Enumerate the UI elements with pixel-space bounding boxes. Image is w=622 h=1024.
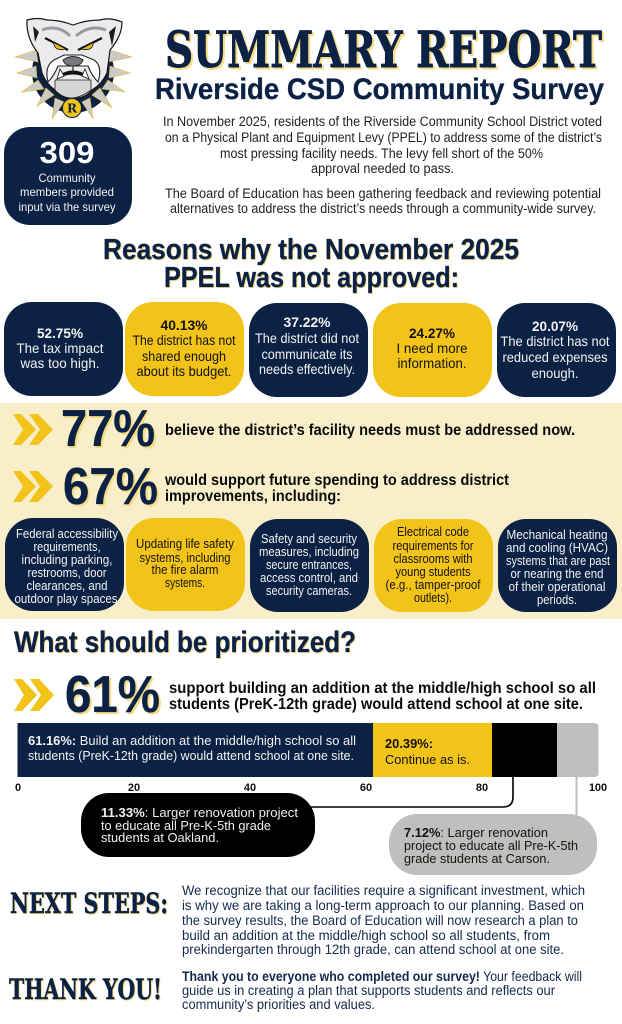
improvement card: HVAC: Mechanical heating	[506, 528, 608, 542]
reason card: budget: 40.13%	[160, 317, 208, 333]
head	[27, 18, 122, 99]
stat text: 61%	[169, 680, 596, 713]
improvement card: security: security cameras.	[266, 584, 352, 598]
improvement card: HVAC: periods.	[537, 593, 577, 607]
improvement card: accessibility	[5, 518, 124, 611]
icon: bulldog mascot logo: R	[67, 102, 78, 116]
improvement card: accessibility: requirements,	[34, 540, 100, 554]
improvement card: life safety: systems, including	[140, 551, 230, 565]
reason card: tax impact	[4, 302, 123, 396]
reason card: more information	[373, 303, 492, 397]
callout: Carson 7.12%	[389, 814, 597, 875]
heading: what should be prioritized: What should be prioritized?	[14, 626, 356, 659]
improvement card: security: measures, including	[259, 545, 359, 559]
stat card: 309 respondents: input via the survey	[18, 200, 116, 214]
improvement card: security	[250, 519, 369, 612]
improvement card: security: access control, and	[260, 571, 358, 585]
improvement card: security: secure entrances,	[266, 558, 352, 572]
stat text: 67%	[164, 472, 509, 505]
reason card: budget: shared enough	[142, 348, 226, 364]
improvement card: HVAC: of their operational	[508, 580, 606, 594]
improvement card: accessibility: restrooms, door	[28, 566, 106, 580]
chart axis labels: 60	[360, 782, 372, 794]
stat text: 67%: improvements, including:	[165, 488, 341, 505]
reason card: tax impact: was too high.	[20, 355, 99, 371]
intro text: most pressing facility needs. The levy fell short of the 50%	[220, 146, 543, 161]
thank you text	[182, 969, 582, 1012]
heading: reasons	[103, 234, 519, 294]
improvement card: accessibility: including parking,	[22, 553, 112, 567]
improvement card: electrical	[374, 519, 493, 612]
reason card: expenses: enough.	[532, 365, 578, 381]
stacked bar chart	[18, 723, 598, 777]
improvement card: HVAC	[498, 519, 617, 612]
reason card: communication: The district did not	[255, 330, 359, 346]
callout: Oakland 11.33%: students at Oakland.	[101, 831, 219, 845]
eyes	[53, 42, 94, 50]
stacked bar chart: Continue as is.	[385, 753, 470, 767]
thank you text: guide us in creating a plan that supports students and reflects our	[182, 983, 555, 998]
chart axis labels: 80	[476, 782, 488, 794]
reason card: tax impact: 52.75%	[37, 325, 84, 341]
callout: Carson 7.12%: 7.12%: Larger renovation	[404, 826, 548, 840]
improvement card: accessibility: clearances, and	[26, 579, 108, 593]
callout: Carson 7.12%: project to educate all Pre-K-5th	[404, 839, 578, 853]
heading: next steps: NEXT STEPS:	[10, 887, 168, 920]
icon: bulldog mascot logo	[15, 18, 132, 119]
stat: 61%: 61%	[65, 666, 160, 724]
improvement card: accessibility: outdoor play spaces	[14, 592, 118, 606]
intro text	[163, 114, 602, 216]
stat: 67%: 67%	[63, 458, 158, 516]
improvement card: HVAC: and cooling (HVAC)	[506, 541, 608, 555]
stat text: 67%: would support future spending to address district	[164, 472, 509, 489]
improvement card: electrical: (e.g., tamper-proof	[386, 578, 481, 592]
connector: black callout	[300, 777, 513, 807]
reason card: communication: 37.22%	[284, 314, 331, 330]
next steps text: We recognize that our facilities require a significant investment, which	[182, 883, 585, 898]
improvement card: electrical: young students	[396, 565, 470, 579]
stacked bar chart: students (PreK-12th grade) would attend school at one site.	[28, 749, 354, 763]
next steps text: the survey results, the Board of Education will now research a plan to	[182, 913, 578, 928]
improvement card: HVAC: or nearing the end	[510, 567, 604, 581]
intro text: approval needed to pass.	[311, 161, 454, 176]
reason card: expenses: reduced expenses	[502, 349, 608, 365]
reason card: tax impact: The tax impact	[16, 340, 104, 356]
thank you text: Thank you to everyone who completed our survey! Your feedback will	[182, 969, 582, 984]
improvement card: life safety: systems.	[165, 576, 205, 590]
improvement card: electrical: Electrical code	[397, 525, 469, 539]
improvement card: life safety: the fire alarm	[152, 563, 218, 577]
heading: thank you: THANK YOU!	[9, 973, 162, 1006]
reason card: more information: information.	[398, 355, 466, 371]
medallion	[62, 98, 82, 118]
stat card: 309 respondents: members provided	[20, 185, 114, 199]
stacked bar chart: 61.16%: Build an addition at the middle/high school so all	[28, 734, 356, 748]
stat text: 61%: support building an addition at the middle/high school so all	[169, 680, 596, 697]
next steps text	[182, 883, 585, 957]
chart axis labels: 40	[244, 782, 256, 794]
muzzle	[47, 55, 100, 82]
improvement card: accessibility: Federal accessibility	[16, 527, 119, 541]
reason card: expenses: 20.07%	[532, 318, 579, 334]
reason card: budget: about its budget.	[136, 363, 232, 379]
next steps text: is why we are taking a long-term approach to our planning. Based on	[182, 898, 584, 913]
stat card: 309 respondents: 309	[40, 135, 94, 170]
icon: chevrons 61%	[14, 679, 54, 711]
icon: chevrons 77%	[13, 414, 53, 445]
reason card: communication: needs effectively.	[259, 361, 355, 377]
chart axis labels: 20	[128, 782, 140, 794]
reason card: communication	[249, 303, 368, 397]
improvement card: electrical: classrooms with	[394, 552, 472, 566]
reason card: more information: 24.27%	[409, 325, 456, 341]
stat: 77%: 77%	[61, 400, 155, 458]
callout: Carson 7.12%: grade students at Carson.	[404, 852, 550, 866]
callout: Oakland 11.33%: to educate all Pre-K-5th grade	[101, 819, 271, 833]
improvement card: electrical: requirements for	[392, 539, 474, 553]
subtitle: Riverside CSD Community Survey	[155, 73, 605, 106]
next steps text: prekindergarten through 12th grade, can attend school at one site.	[182, 942, 564, 957]
callout: Oakland 11.33%	[81, 793, 315, 857]
intro text: alternatives to address the district’s needs through a community-wide survey.	[170, 201, 596, 216]
reason card: communication: communicate its	[262, 346, 352, 362]
icon: chevrons 67%	[13, 471, 53, 502]
callout: Oakland 11.33%: 11.33%: Larger renovation project	[101, 806, 299, 820]
stat text: 61%: students (PreK-12th grade) would attend school at one site.	[169, 696, 583, 713]
reason card: expenses	[497, 303, 616, 397]
chart axis labels: 100	[589, 782, 607, 794]
improvement card: life safety: Updating life safety	[136, 537, 235, 551]
stacked bar chart: 20.39%:	[385, 737, 433, 751]
intro text: The Board of Education has been gathering feedback and reviewing potential	[165, 186, 601, 201]
heading: reasons: PPEL was not approved:	[164, 262, 459, 294]
nose	[63, 56, 83, 66]
thank you text: community’s priorities and values.	[182, 997, 375, 1012]
stat text: 77%: believe the district’s facility needs must be addressed now.	[165, 422, 575, 439]
cream band panel	[0, 403, 622, 619]
heading: reasons: Reasons why the November 2025	[103, 234, 519, 266]
intro text: In November 2025, residents of the Riverside Community School District voted	[163, 114, 602, 129]
chart axis labels	[15, 782, 607, 794]
reason card: budget	[125, 302, 244, 396]
improvement card: electrical: outlets).	[414, 591, 452, 605]
stat card: 309 respondents: Community	[38, 171, 96, 185]
reason card: more information: I need more	[396, 340, 468, 356]
improvement card: life safety	[126, 518, 245, 611]
stat card: 309 respondents	[4, 127, 132, 225]
improvement card: security: Safety and security	[261, 532, 358, 546]
reason card: expenses: The district has not	[500, 333, 610, 349]
mouth and chin	[55, 80, 91, 98]
next steps text: build an addition at the middle/high school so all students, from	[182, 928, 550, 943]
connector: gray callout	[576, 777, 578, 820]
reason card: budget: The district has not	[132, 332, 236, 348]
chart axis labels: 0	[15, 782, 21, 794]
